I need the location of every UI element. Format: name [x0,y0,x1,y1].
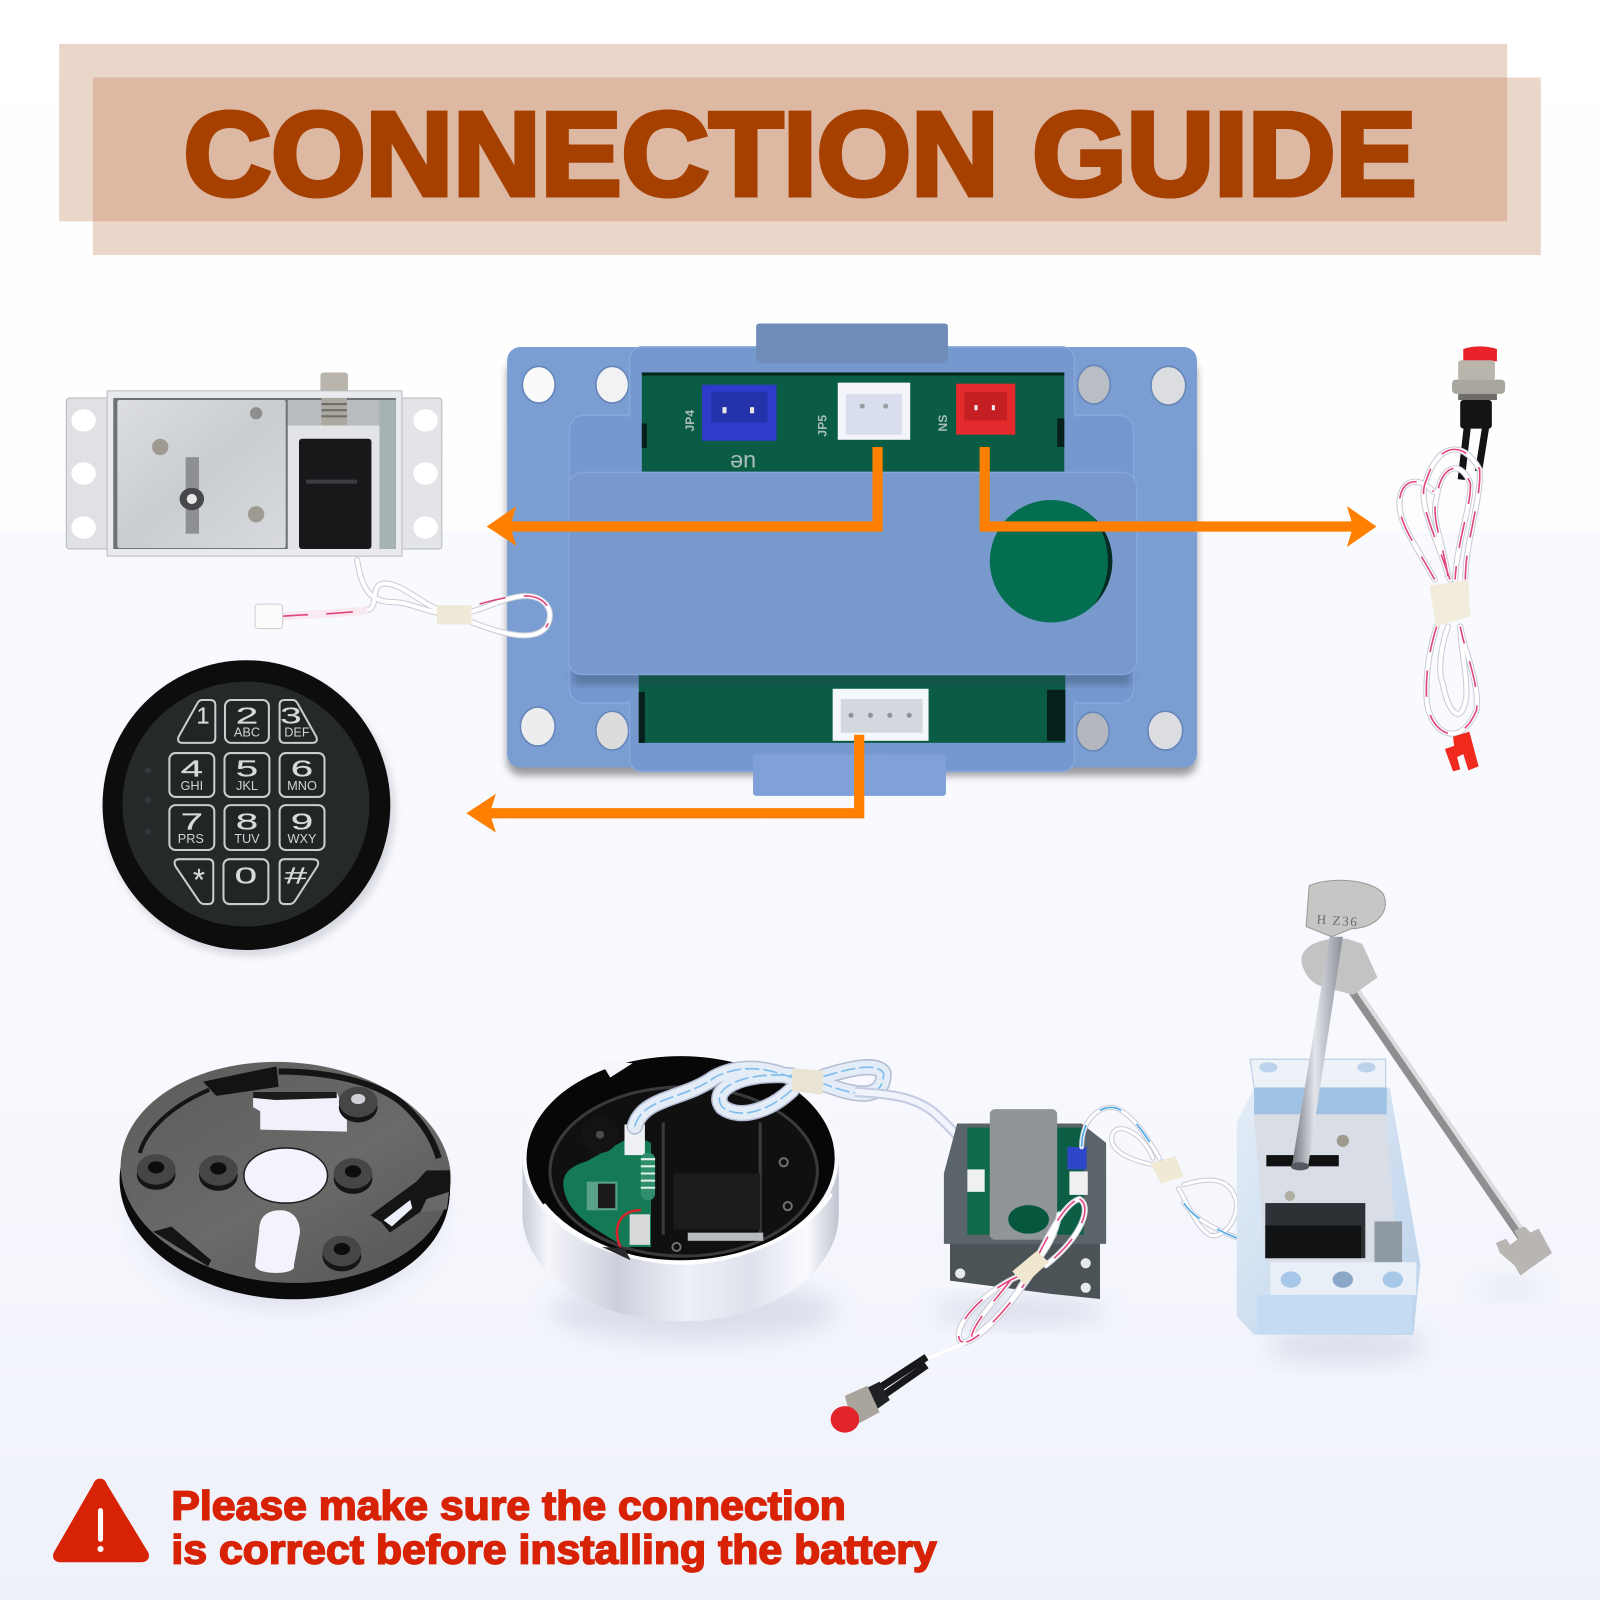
control board [507,323,1197,796]
key 7: 7 [181,809,203,835]
key 4 [169,753,214,797]
key 1 [178,700,215,743]
key 9 [280,805,324,850]
slab hole [990,500,1112,622]
key 3: DEF [284,725,310,740]
title banner [59,44,1541,255]
NS connector [936,384,1015,435]
button wire bundle [927,1199,1085,1359]
key 7 [169,805,214,850]
keypad [103,660,390,950]
warning line 2: is correct before installing the battery [171,1526,937,1572]
key 8: 8 [236,809,258,835]
push button with cable [1399,346,1505,771]
arrow: bottom connector to keypad [466,735,859,833]
silkscreen mark: ue [730,450,756,476]
warning icon [53,1479,149,1562]
key 3: 3 [280,702,302,728]
raised housing [569,347,1134,771]
small control box [934,1109,1107,1326]
key stamp: H Z36 [1316,911,1359,929]
solenoid lock photo [66,372,442,556]
base plate cutouts [153,1066,450,1273]
top clip [756,323,948,363]
key 0: 0 [235,863,257,889]
lock wire [255,560,550,635]
key star [175,859,213,904]
base plate [112,1051,458,1310]
warning line 1: Please make sure the connection [171,1482,846,1528]
key hash [280,859,318,904]
key 8: TUV [234,831,260,846]
bottom clip [753,754,946,796]
pcb bottom [639,668,1065,743]
key 9: WXY [288,831,317,846]
NS connector: NS [936,415,950,432]
key 1 [1291,880,1385,1170]
key 9: 9 [291,809,313,835]
key 1: 1 [197,702,210,728]
key 2: ABC [234,725,260,740]
key 0 [223,859,268,904]
key 2 [1301,939,1552,1276]
ribbon cable [635,1067,978,1169]
arrow: NS to push button [985,447,1377,547]
key 5: JKL [236,778,258,793]
bottom connector [833,689,929,741]
key star: * [193,863,205,897]
center slab [568,472,1137,674]
key 5: 5 [236,756,258,782]
key 4: GHI [181,778,203,793]
base plate bosses [137,1087,378,1271]
mechanical lock with keys [1237,880,1552,1363]
circuit board [563,1116,655,1247]
small push button [831,1357,927,1433]
housing interior [550,1087,817,1256]
base plate grooves [140,1071,439,1158]
pcb top [642,372,1064,474]
key 7: PRS [178,831,204,846]
key 8 [224,805,269,850]
mounting plate [507,347,1197,767]
under-slab shade [573,668,1131,685]
lock body [1237,1059,1420,1335]
key 6 [280,753,324,797]
JP4 connector: JP4 [683,410,697,432]
title: CONNECTION GUIDE [184,89,1416,221]
key 5 [224,753,269,797]
blue wire to lock [1082,1107,1258,1247]
key hash: # [285,863,307,889]
key 4: 4 [181,756,203,782]
JP5 connector [816,383,910,440]
key 6: MNO [287,778,317,793]
key 2: 2 [236,702,258,728]
warning text [171,1482,937,1572]
JP4 connector [683,385,777,441]
housing seam cover [571,417,1132,701]
key 2 [225,700,269,743]
chrome housing [522,1053,978,1342]
keypad shadow [105,666,395,956]
JP5 connector: JP5 [816,415,830,437]
key 3 [280,700,317,743]
arrow: JP5 to lock [487,447,878,546]
key 6: 6 [291,756,313,782]
